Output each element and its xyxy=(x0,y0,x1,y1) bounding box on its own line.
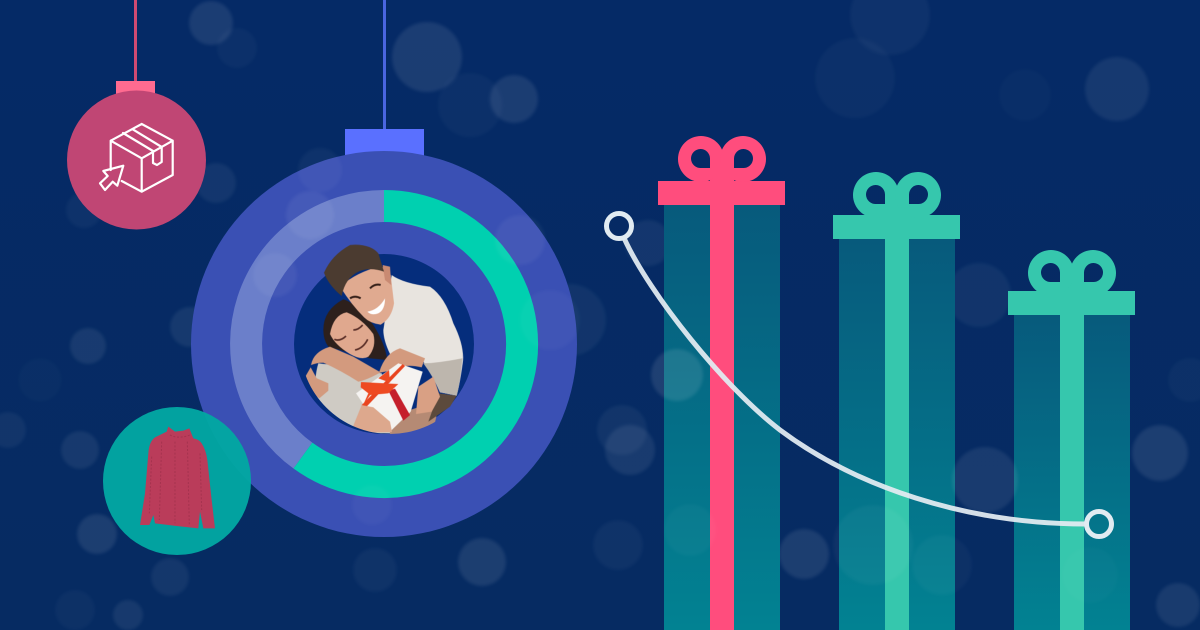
man's smile xyxy=(367,298,385,314)
gift bar 2 xyxy=(833,172,960,630)
icon: box with cursor xyxy=(100,124,173,192)
man's shirt xyxy=(383,275,463,396)
lid xyxy=(833,215,960,239)
gift bar 1 xyxy=(658,136,785,630)
ornament ball xyxy=(191,151,577,537)
icon: red sweater xyxy=(140,427,215,528)
bow xyxy=(678,136,766,182)
lower filler xyxy=(390,408,437,434)
donut track xyxy=(246,206,384,456)
pink ball xyxy=(67,90,206,230)
ornament highlights xyxy=(253,148,580,525)
ribbon xyxy=(885,186,909,630)
gift body xyxy=(664,205,780,630)
pink cap xyxy=(116,81,155,95)
lid xyxy=(658,181,785,205)
left hand xyxy=(303,367,328,398)
bow xyxy=(853,172,941,218)
gift body xyxy=(1014,315,1130,630)
bow xyxy=(1028,250,1116,296)
shirt shadow xyxy=(423,358,462,396)
lid xyxy=(1008,291,1135,315)
gift body xyxy=(839,239,955,630)
curve xyxy=(624,238,1086,524)
trend line xyxy=(606,214,1112,536)
right hand xyxy=(416,377,440,414)
bar highlights xyxy=(651,349,1118,603)
man's arm xyxy=(311,347,425,382)
man's face xyxy=(340,266,394,325)
photo backdrop xyxy=(294,254,474,434)
woman's face xyxy=(330,312,374,358)
gift ribbon xyxy=(388,389,410,421)
woman's sweater xyxy=(315,363,403,433)
man's ear xyxy=(383,265,391,285)
large ornament xyxy=(191,0,577,537)
woman's hair xyxy=(323,299,387,360)
pink ornament xyxy=(67,0,206,230)
gift ribbon thin xyxy=(362,364,405,408)
ribbon xyxy=(710,150,734,630)
pink string xyxy=(134,0,137,82)
gift bar 3 xyxy=(1008,250,1135,630)
ornament string xyxy=(383,0,386,130)
man's hair xyxy=(324,245,384,296)
photo: couple with gift xyxy=(303,245,463,435)
sweater ornament xyxy=(103,407,251,555)
start marker xyxy=(606,214,632,238)
gift bow xyxy=(361,370,398,407)
end marker xyxy=(1086,512,1112,536)
gift box xyxy=(356,363,423,432)
lower hand xyxy=(353,405,392,433)
sweater texture xyxy=(149,435,202,526)
donut value arc xyxy=(303,206,522,482)
teal ball xyxy=(103,407,251,555)
pants xyxy=(428,393,457,422)
man's features xyxy=(350,285,381,298)
ribbon xyxy=(1060,264,1084,630)
woman's features xyxy=(334,325,368,350)
ornament cap xyxy=(345,129,424,159)
